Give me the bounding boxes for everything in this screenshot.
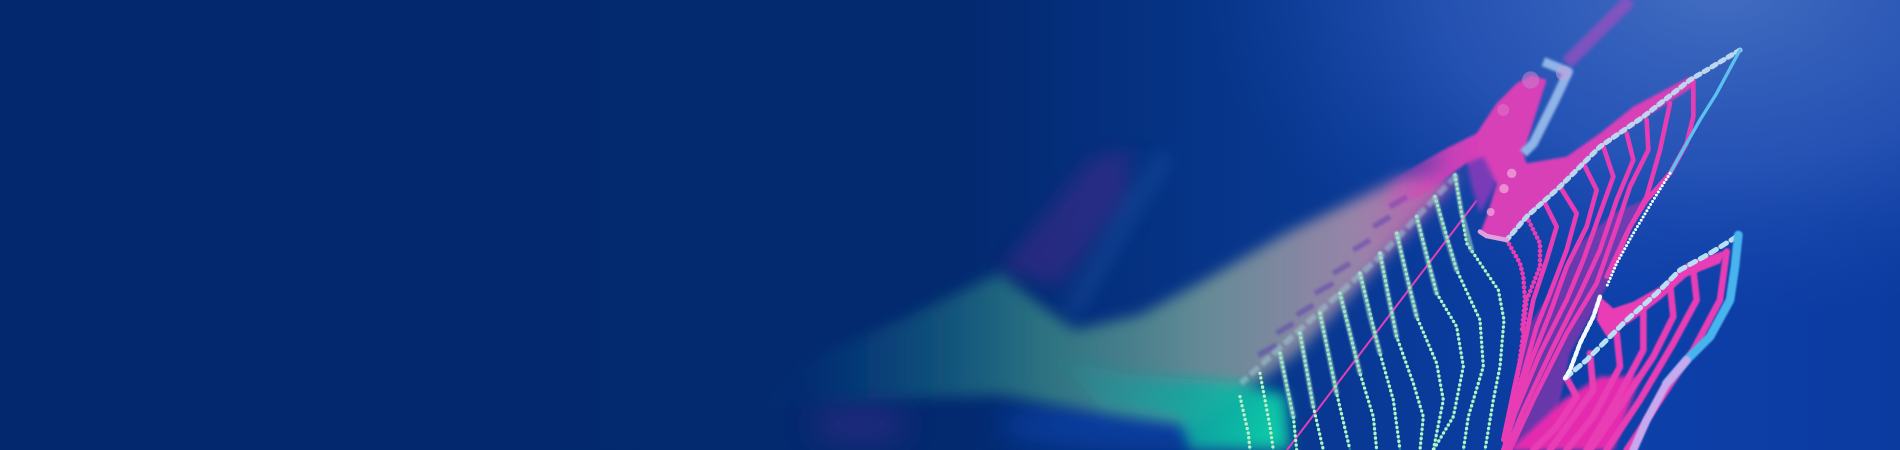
pink converging band of fan one	[1503, 200, 1643, 450]
thin pink diagonal line	[1287, 200, 1477, 450]
pink fan one	[1503, 80, 1693, 450]
pale diagonal ridge over the green lines	[1241, 175, 1457, 383]
upper pink mass with ghost peak	[1380, 62, 1693, 240]
white dashed ridge lines	[1480, 50, 1740, 378]
blurred wave mass: teal to mauve	[760, 175, 1460, 450]
green wave lines	[1240, 175, 1504, 450]
purple shadow dashes inside the blurred mass	[1258, 197, 1407, 355]
data wave drawn in zoomed coordinates	[1240, 50, 1740, 450]
pale thick upper ends of the green lines	[1280, 175, 1472, 417]
thick pink line rising off the top	[1567, 0, 1630, 63]
outer cyan edge of fan two	[1633, 235, 1738, 450]
pink fan two with converging fill	[1510, 250, 1727, 450]
outer cyan edge of fan one	[1607, 50, 1740, 287]
ghost reflection: blurred pink and blue streaks	[1000, 150, 1165, 315]
